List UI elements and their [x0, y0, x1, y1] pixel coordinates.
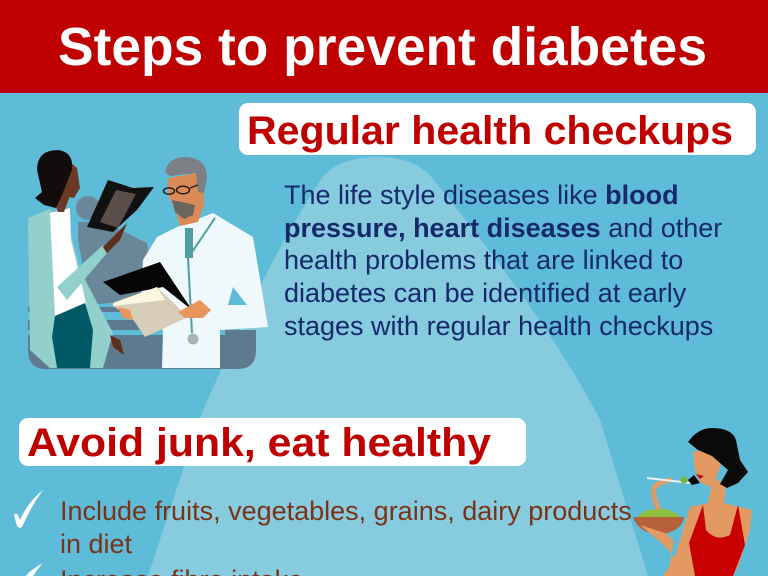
heading: Avoid junk, eat healthy: Avoid junk, eat healthy — [27, 421, 492, 465]
title banner — [0, 0, 768, 93]
doctor with chart — [103, 157, 268, 368]
item: fruits and vegetables: Include fruits, vegetables, grains, dairy products — [60, 496, 632, 526]
heading: Regular health checkups: Regular health checkups — [247, 109, 733, 153]
body text: regular health checkups: stages with regular health checkups — [284, 311, 713, 341]
illustration: doctors reviewing x-ray — [28, 150, 268, 369]
item: fruits and vegetables — [60, 496, 632, 559]
background light cone — [148, 157, 648, 576]
body text: regular health checkups — [284, 180, 722, 341]
body text: regular health checkups: The life style diseases like blood — [284, 180, 679, 210]
body text: regular health checkups: pressure, heart diseases and other — [284, 213, 722, 243]
item: fruits and vegetables: in diet — [60, 529, 133, 559]
icon: check mark — [24, 563, 43, 576]
title banner: Steps to prevent diabetes — [58, 17, 707, 77]
icon: check mark — [14, 490, 43, 528]
body text: regular health checkups: health problems that are linked to — [284, 245, 683, 275]
illustration: woman eating salad — [633, 428, 752, 576]
background bench and silhouette — [28, 196, 256, 369]
body text: regular health checkups: diabetes can be identified at early — [284, 278, 687, 308]
checklist — [14, 490, 632, 576]
woman with x-ray — [28, 150, 154, 368]
